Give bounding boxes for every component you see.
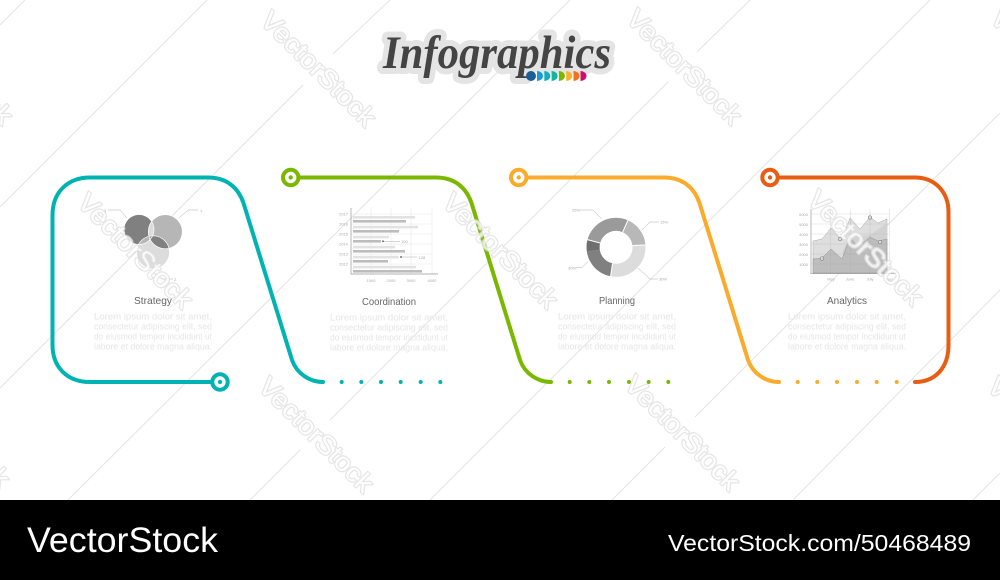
chart: horizontal bar chart: 2016 (339, 222, 349, 226)
chart: area chart: 4000 (799, 232, 809, 237)
watermarks: VectorStock (253, 371, 381, 499)
chart: donut chart: 25% (572, 208, 580, 212)
chart: area chart (799, 209, 896, 282)
text block: coordination: do eiusmod tempor incididunt ut (330, 332, 448, 344)
icon: green ring (283, 170, 298, 185)
text block: planning: labore et dolore magna aliqua. (558, 342, 676, 352)
text block: strategy: labore et dolore magna aliqua. (94, 342, 212, 352)
chart: area chart: June (846, 276, 855, 282)
panel: analytics (762, 170, 948, 382)
icon: rainbow dots (526, 71, 586, 81)
panel: coordination (283, 170, 670, 384)
chart: horizontal bar chart: 2013 (339, 252, 349, 256)
text block: coordination (330, 312, 448, 354)
footer image id: VectorStock.com/50468489 (668, 530, 971, 556)
text block: strategy: do eiusmod tempor incididunt ut (94, 332, 212, 342)
title: Infographics logo: Infographics (382, 27, 611, 79)
chart: horizontal bar chart: 2014 (339, 242, 349, 246)
footer bar (0, 500, 1000, 580)
heading: Strategy: Strategy (134, 295, 173, 307)
chart: venn diagram: 3 (104, 208, 107, 213)
watermarks: VectorStock (255, 5, 383, 133)
chart: horizontal bar chart: 2015 (339, 232, 349, 236)
text block: planning: do eiusmod tempor incididunt ut (558, 332, 676, 342)
chart: horizontal bar chart: 128 (418, 255, 426, 260)
text block: analytics: do eiusmod tempor incididunt ut (788, 332, 906, 342)
text block: analytics (788, 312, 906, 352)
heading: Planning: Planning (599, 295, 635, 307)
chart: donut chart: 30% (659, 276, 667, 282)
watermarks: VectorStock (802, 184, 930, 312)
heading: Analytics: Analytics (827, 295, 867, 307)
text block: strategy (94, 312, 212, 352)
chart: venn diagram (104, 208, 203, 282)
red-orange outline (778, 178, 948, 382)
text block: strategy: consectetur adipiscing elit, sed (94, 322, 212, 332)
chart: venn diagram: 2 (174, 277, 177, 282)
chart: horizontal bar chart: 3000 (407, 278, 416, 283)
watermarks: VectorStock (619, 369, 747, 497)
teal outline (52, 178, 323, 382)
teal dots (340, 380, 442, 384)
text block: coordination: Lorem ipsum dolor sit amet, (330, 312, 448, 324)
chart: donut chart: 30% (568, 266, 576, 270)
icon: teal ring (212, 374, 228, 390)
watermarks: VectorStock (72, 187, 200, 315)
chart: area chart: Aug (885, 276, 893, 282)
watermarks: VectorStock (437, 187, 565, 315)
chart: horizontal bar chart: 2000 (387, 278, 396, 283)
text block: planning (558, 312, 676, 352)
text block: analytics: Lorem ipsum dolor sit amet, (788, 312, 906, 322)
chart: donut chart: 15% (660, 220, 668, 224)
chart: horizontal bar chart: 2012 (339, 262, 349, 266)
text block: planning: consectetur adipiscing elit, sed (558, 322, 676, 332)
text block: planning: Lorem ipsum dolor sit amet, (558, 312, 676, 322)
green outline (298, 178, 551, 382)
text block: coordination: labore et dolore magna aliqua. (330, 342, 448, 354)
heading: Coordination: Coordination (362, 296, 416, 308)
chart: horizontal bar chart (339, 208, 438, 283)
chart: area chart: May (827, 276, 835, 282)
orange outline (526, 178, 779, 382)
chart: area chart: July (866, 276, 874, 282)
text block: analytics: labore et dolore magna aliqua. (788, 342, 906, 352)
chart: area chart: 2000 (799, 252, 809, 257)
chart: horizontal bar chart: 1000 (367, 278, 376, 283)
chart: donut chart (568, 208, 668, 282)
icon: red-orange ring (762, 170, 778, 185)
panel: planning (511, 170, 899, 384)
chart: horizontal bar chart: 4000 (428, 278, 437, 283)
chart: area chart: 1000 (799, 262, 809, 267)
chart: horizontal bar chart: 2017 (339, 212, 349, 216)
chart: horizontal bar chart: 100 (401, 239, 408, 244)
text block: strategy: Lorem ipsum dolor sit amet, (94, 312, 212, 322)
panel: strategy (52, 178, 442, 390)
chart: area chart: 3000 (799, 242, 809, 247)
text block: analytics: consectetur adipiscing elit, sed (788, 322, 906, 332)
title: Infographics logo: Infographics (382, 27, 611, 79)
footer brand: VectorStock (27, 521, 219, 560)
watermarks: VectorStock (621, 3, 749, 131)
chart: area chart: 5000 (799, 222, 809, 227)
chart: venn diagram: 1 (200, 208, 203, 213)
text block: coordination: consectetur adipiscing elit, sed (330, 322, 448, 334)
chart: area chart: 6000 (799, 212, 809, 217)
orange dots (796, 380, 899, 384)
icon: orange ring (511, 170, 526, 185)
green dots (568, 380, 670, 384)
